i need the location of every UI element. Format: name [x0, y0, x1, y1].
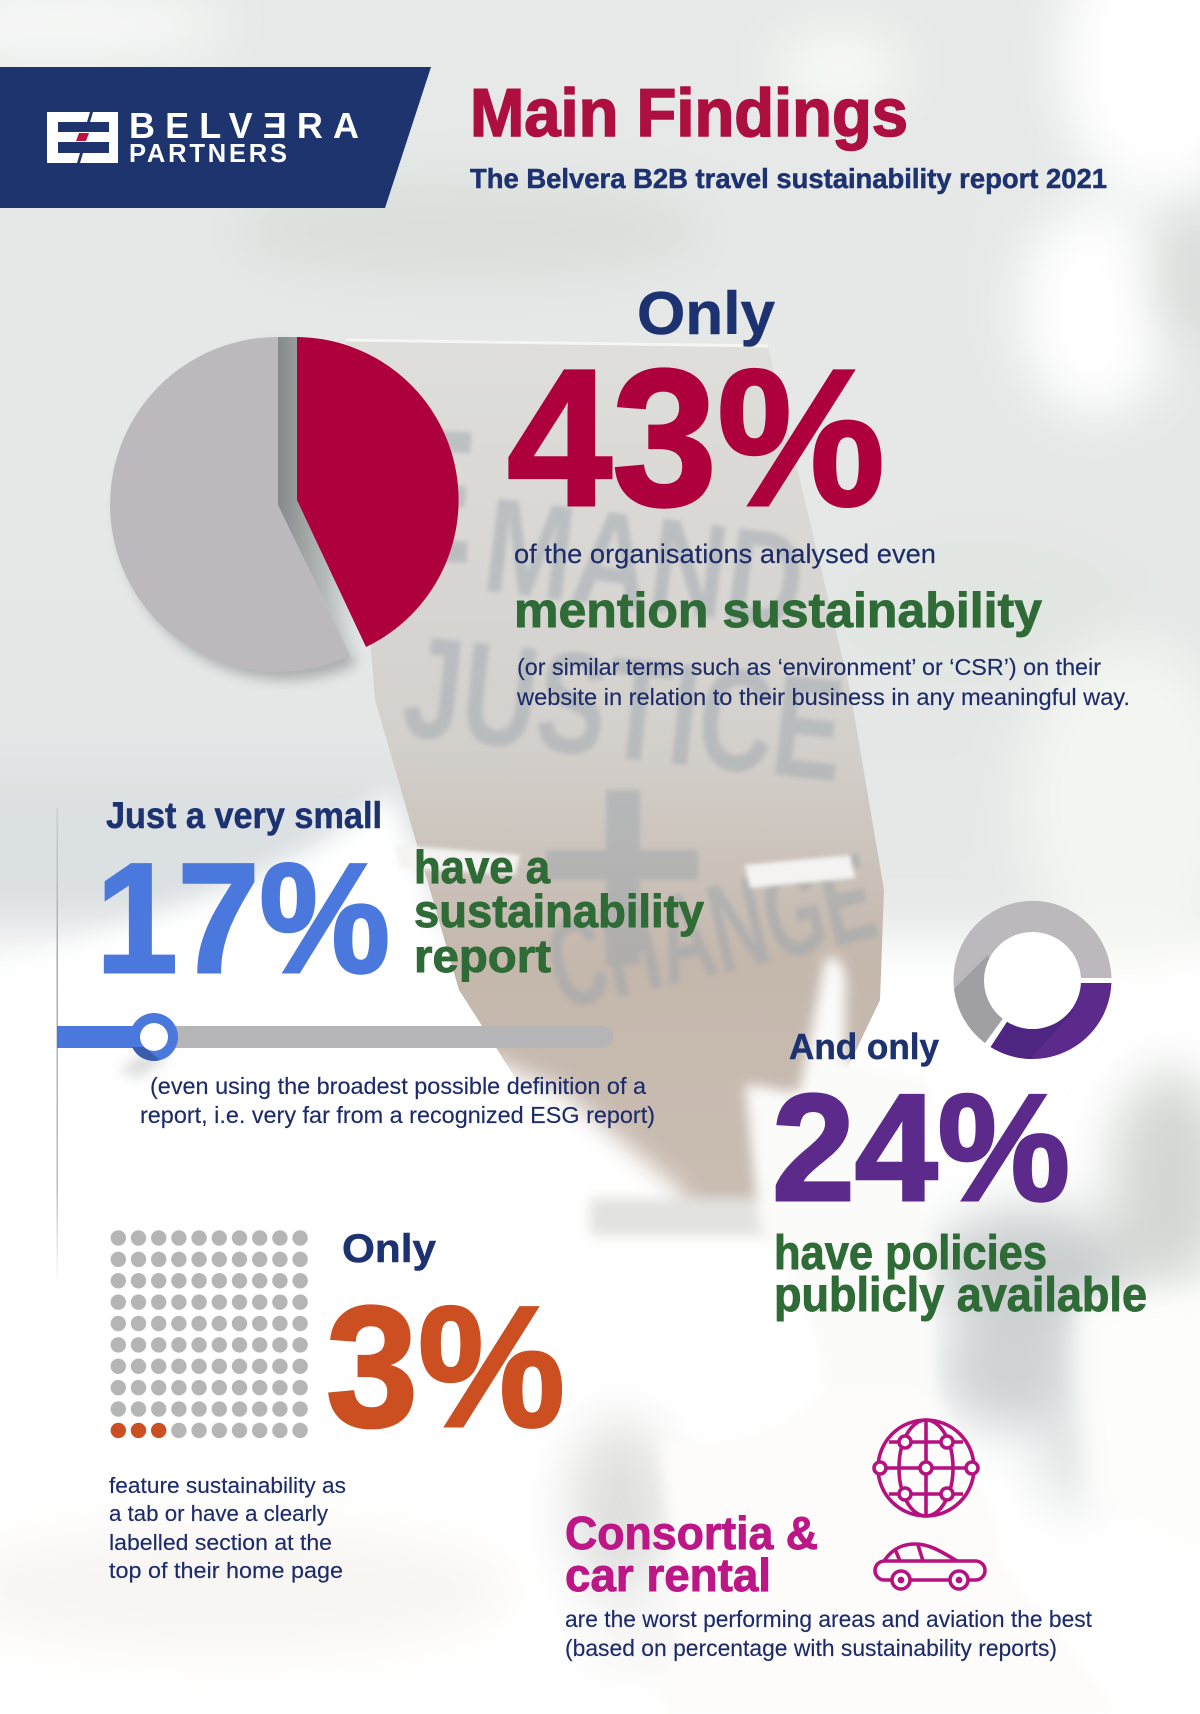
caption: 3%	[109, 1473, 346, 1583]
stat: 43%	[507, 280, 1130, 710]
header banner with logo	[0, 67, 431, 208]
slider knob	[130, 1013, 178, 1061]
stat: 43%: of the organisations analysed even	[514, 539, 936, 569]
logo mark	[47, 112, 118, 163]
stat: 17%: sustainability	[414, 885, 704, 937]
stat: 17%: have a	[414, 841, 550, 893]
logo wordmark	[129, 105, 359, 168]
background photo: washed-out protest sign: CHANGE	[535, 827, 888, 1036]
stat: 43%: (or similar terms such as ‘environment’ or ‘CSR’) on their	[517, 654, 1101, 680]
stat: 17%: Just a very small	[106, 795, 382, 836]
stat: consortia and car rental: (based on percentage with sustainability reports)	[565, 1635, 1057, 1661]
caption: 17%	[140, 1073, 655, 1128]
red slice	[297, 337, 459, 647]
grey slice	[110, 337, 349, 672]
vertical divider	[56, 808, 58, 1286]
subtitle: The Belvera B2B travel sustainability report 2021	[470, 163, 1107, 194]
caption: 17%: (even using the broadest possible definition of a	[150, 1073, 647, 1099]
stat: 3%: Only	[342, 1227, 437, 1271]
logo wordmark: PARTNERS	[129, 140, 287, 168]
stat: consortia and car rental: are the worst performing areas and aviation the best	[565, 1606, 1092, 1632]
pie chart: 43%	[110, 337, 459, 680]
caption: 17%: report, i.e. very far from a recognized ESG report)	[140, 1102, 655, 1128]
stat: 24%: 24%	[772, 1063, 1070, 1233]
stat: 24%	[772, 1026, 1147, 1322]
stat: 17%	[96, 795, 704, 1006]
title: Main Findings	[470, 75, 908, 151]
stat: consortia and car rental: Consortia &	[565, 1507, 818, 1559]
background photo: washed-out protest sign: JUSTICE	[397, 605, 851, 812]
stat: 24%: have policies	[774, 1227, 1047, 1280]
stat: 17%: report	[414, 930, 551, 982]
caption: 3%: labelled section at the	[109, 1530, 332, 1555]
stat: consortia and car rental: car rental	[565, 1549, 771, 1601]
caption: 3%: top of their home page	[109, 1558, 343, 1583]
stat: 24%: publicly available	[774, 1269, 1147, 1322]
logo wordmark: BELVƎRA	[129, 105, 359, 146]
stat: 43%: website in relation to their business in any meaningful way.	[516, 684, 1130, 710]
donut chart: 24%	[953, 901, 1112, 1064]
stat: 43%: mention sustainability	[514, 584, 1042, 638]
icon: car	[875, 1544, 985, 1589]
dot grid: 3 of 100	[108, 1227, 310, 1441]
stat: 43%: Only	[637, 280, 776, 347]
progress bar: 17%	[57, 1013, 613, 1078]
stat: 24%: And only	[789, 1026, 939, 1067]
background photo: washed-out protest sign: MAND	[476, 469, 812, 658]
caption: 3%: feature sustainability as	[109, 1473, 346, 1498]
caption: 3%: a tab or have a clearly	[109, 1501, 329, 1526]
stat: 3%: 3%	[326, 1271, 565, 1463]
stat: 43%: 43%	[507, 329, 885, 547]
stat: 17%: 17%	[96, 832, 390, 1006]
icon: globe	[874, 1420, 978, 1516]
background photo: washed-out protest sign: E	[408, 389, 479, 604]
stat: consortia and car rental	[565, 1507, 1092, 1661]
